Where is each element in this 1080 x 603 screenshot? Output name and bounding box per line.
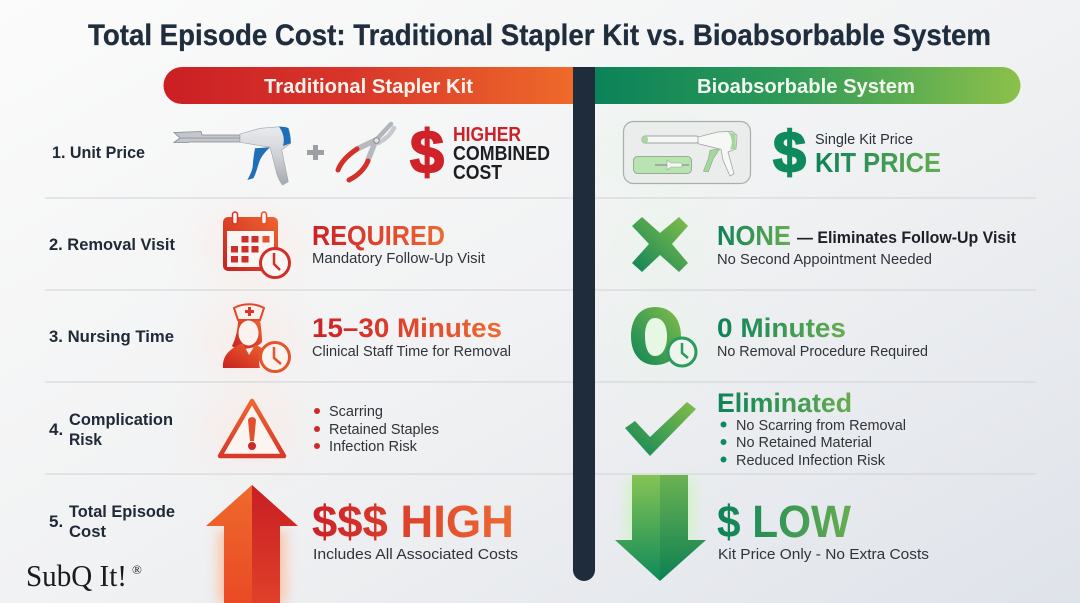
header: Traditional Stapler Kit: Traditional Stapler Kit [264, 76, 473, 98]
icon: green check [625, 402, 696, 456]
text: low cost: $ LOW [717, 496, 851, 547]
icon: green dollar: $ [773, 120, 806, 185]
text: 15-30 minutes: Clinical Staff Time for Removal [312, 344, 511, 360]
text: single kit price: Single Kit Price [815, 132, 913, 148]
row label: 3. Nursing Time: 3. Nursing Time [49, 327, 174, 346]
row label: 2. Removal Visit: 2. Removal Visit [49, 235, 175, 254]
text: low cost [717, 496, 929, 563]
text: eliminated: No Retained Material [736, 435, 872, 451]
text: none: NONE [717, 220, 791, 251]
text: eliminated [717, 388, 906, 469]
header: Traditional Stapler Kit [164, 67, 573, 104]
text: eliminated: No Scarring from Removal [736, 418, 906, 434]
row label: 5. Total Episode Cost: Cost [69, 522, 106, 541]
text: 0 minutes: 0 Minutes [717, 313, 846, 343]
icon: zero with clock [631, 307, 696, 366]
row label: 5. Total Episode Cost [49, 502, 175, 541]
icon: kit box with stapler and tray [624, 122, 750, 184]
icon: green x [632, 217, 688, 272]
text: single kit price: KIT PRICE [815, 147, 941, 178]
logo: SubQ It!: ® [132, 562, 142, 577]
text: none [717, 220, 1016, 268]
row label: 5. Total Episode Cost: Total Episode [69, 502, 175, 521]
header: Bioabsorbable System [595, 67, 1020, 104]
text: required [312, 220, 485, 267]
text: low cost: Kit Price Only - No Extra Costs [718, 547, 929, 563]
text: 0 minutes: No Removal Procedure Required [717, 344, 928, 360]
text: single kit price [815, 132, 941, 178]
title: Total Episode Cost: Traditional Stapler Kit vs. Bioabsorbable System [88, 19, 991, 52]
text: required: Mandatory Follow-Up Visit [312, 251, 485, 267]
list: traditional complications: Infection Risk [329, 439, 418, 455]
text: 15-30 minutes: 15–30 Minutes [312, 313, 502, 343]
row label: 4. Complication Risk: Complication [69, 410, 173, 429]
icon: nurse with clock [223, 304, 290, 372]
text: none: No Second Appointment Needed [717, 252, 932, 268]
text: higher combined cost [453, 124, 550, 184]
list: traditional complications [314, 404, 439, 455]
center divider bar [573, 67, 595, 581]
row label: 1. Unit Price: 1. Unit Price [52, 143, 145, 162]
text: high cost: Includes All Associated Costs [313, 547, 518, 563]
icon: red up arrow [206, 485, 298, 603]
row dividers [45, 198, 1036, 474]
icon: pliers [338, 124, 394, 180]
text: higher combined cost: COMBINED [453, 143, 550, 165]
row label: 5. Total Episode Cost: 5. [49, 512, 63, 531]
row label: 4. Complication Risk: Risk [69, 430, 102, 449]
icon: red dollar: $ [410, 118, 444, 186]
header: Bioabsorbable System: Bioabsorbable System [697, 76, 915, 98]
icon: warning triangle [220, 401, 284, 456]
list: traditional complications: Retained Staples [329, 422, 439, 438]
text: high cost: $$$ HIGH [312, 496, 514, 547]
text: none: — Eliminates Follow-Up Visit [797, 228, 1016, 247]
text: eliminated: Eliminated [717, 388, 852, 418]
text: 15-30 minutes [312, 313, 511, 360]
icon: traditional stapler [174, 127, 291, 185]
text: higher combined cost: COST [453, 162, 502, 184]
text: eliminated: Reduced Infection Risk [736, 453, 886, 469]
text: higher combined cost: HIGHER [453, 124, 521, 146]
icon: calendar with clock [223, 212, 290, 278]
text: required: REQUIRED [312, 220, 445, 251]
icon: green down arrow [615, 475, 706, 581]
text: 0 minutes [717, 313, 928, 360]
icon: plus [307, 145, 324, 160]
row label: 4. Complication Risk [49, 410, 173, 449]
row label: 4. Complication Risk: 4. [49, 420, 63, 439]
list: traditional complications: Scarring [329, 404, 383, 420]
logo: SubQ It!: SubQ It! [26, 558, 127, 593]
